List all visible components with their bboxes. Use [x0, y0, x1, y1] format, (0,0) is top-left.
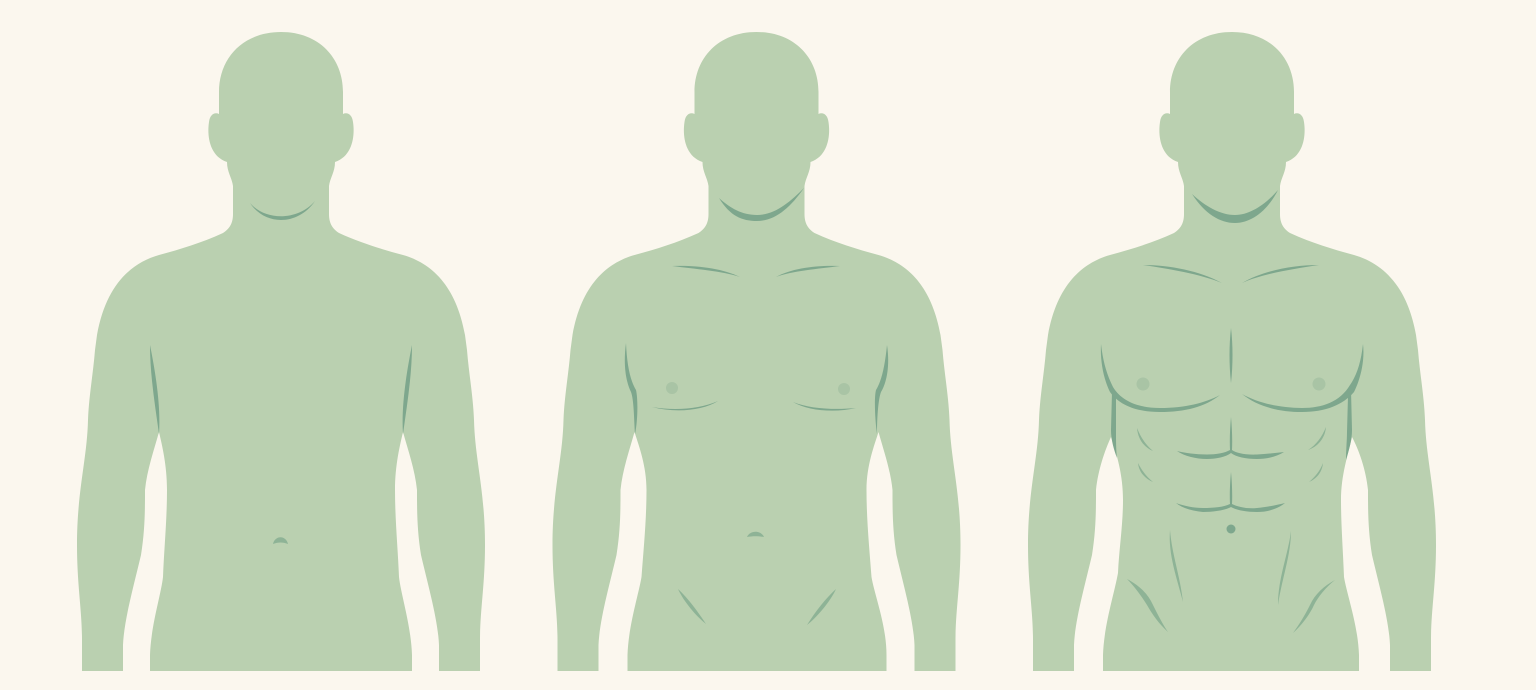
upper abdominal line	[1177, 417, 1284, 459]
right pectoral line	[1242, 344, 1363, 412]
left oblique line	[1170, 530, 1183, 602]
left pectoral line	[1101, 344, 1220, 412]
left upper serratus	[1137, 428, 1153, 451]
lower abdominal line	[1176, 472, 1285, 512]
right collarbone	[1242, 265, 1319, 283]
left collarbone	[672, 266, 740, 277]
left nipple	[1136, 378, 1150, 390]
left collarbone	[1143, 265, 1222, 283]
right upper serratus	[1308, 427, 1326, 450]
right side line	[875, 345, 888, 434]
left side line	[1111, 392, 1117, 458]
left side line	[625, 343, 637, 434]
chin crease	[250, 201, 315, 220]
left lower serratus	[1138, 463, 1153, 482]
right nipple	[1312, 378, 1326, 390]
right oblique line	[1278, 531, 1291, 605]
right nipple	[838, 383, 850, 395]
body silhouette 2	[552, 32, 960, 671]
left hip line	[678, 589, 706, 624]
right hip line	[1293, 580, 1335, 633]
body silhouette 3	[1028, 32, 1436, 671]
chin crease	[719, 188, 804, 221]
right lower serratus	[1309, 463, 1323, 482]
right lower chest line	[793, 402, 856, 411]
body silhouette 1	[77, 32, 485, 671]
chin crease	[1192, 190, 1278, 223]
left nipple	[666, 382, 678, 394]
figure: low muscle definition	[77, 32, 485, 671]
figure: moderate muscle definition	[552, 32, 960, 671]
right side line	[1346, 390, 1352, 460]
navel	[273, 537, 288, 544]
left lower chest line	[652, 401, 718, 410]
sternum line	[1230, 328, 1232, 383]
left hip line	[1127, 579, 1168, 632]
figure: high muscle definition	[1028, 32, 1436, 671]
right side line	[403, 345, 412, 434]
right collarbone	[776, 266, 840, 277]
navel	[1226, 524, 1236, 534]
left side line	[150, 345, 159, 434]
right hip line	[807, 589, 836, 625]
navel	[747, 532, 764, 537]
